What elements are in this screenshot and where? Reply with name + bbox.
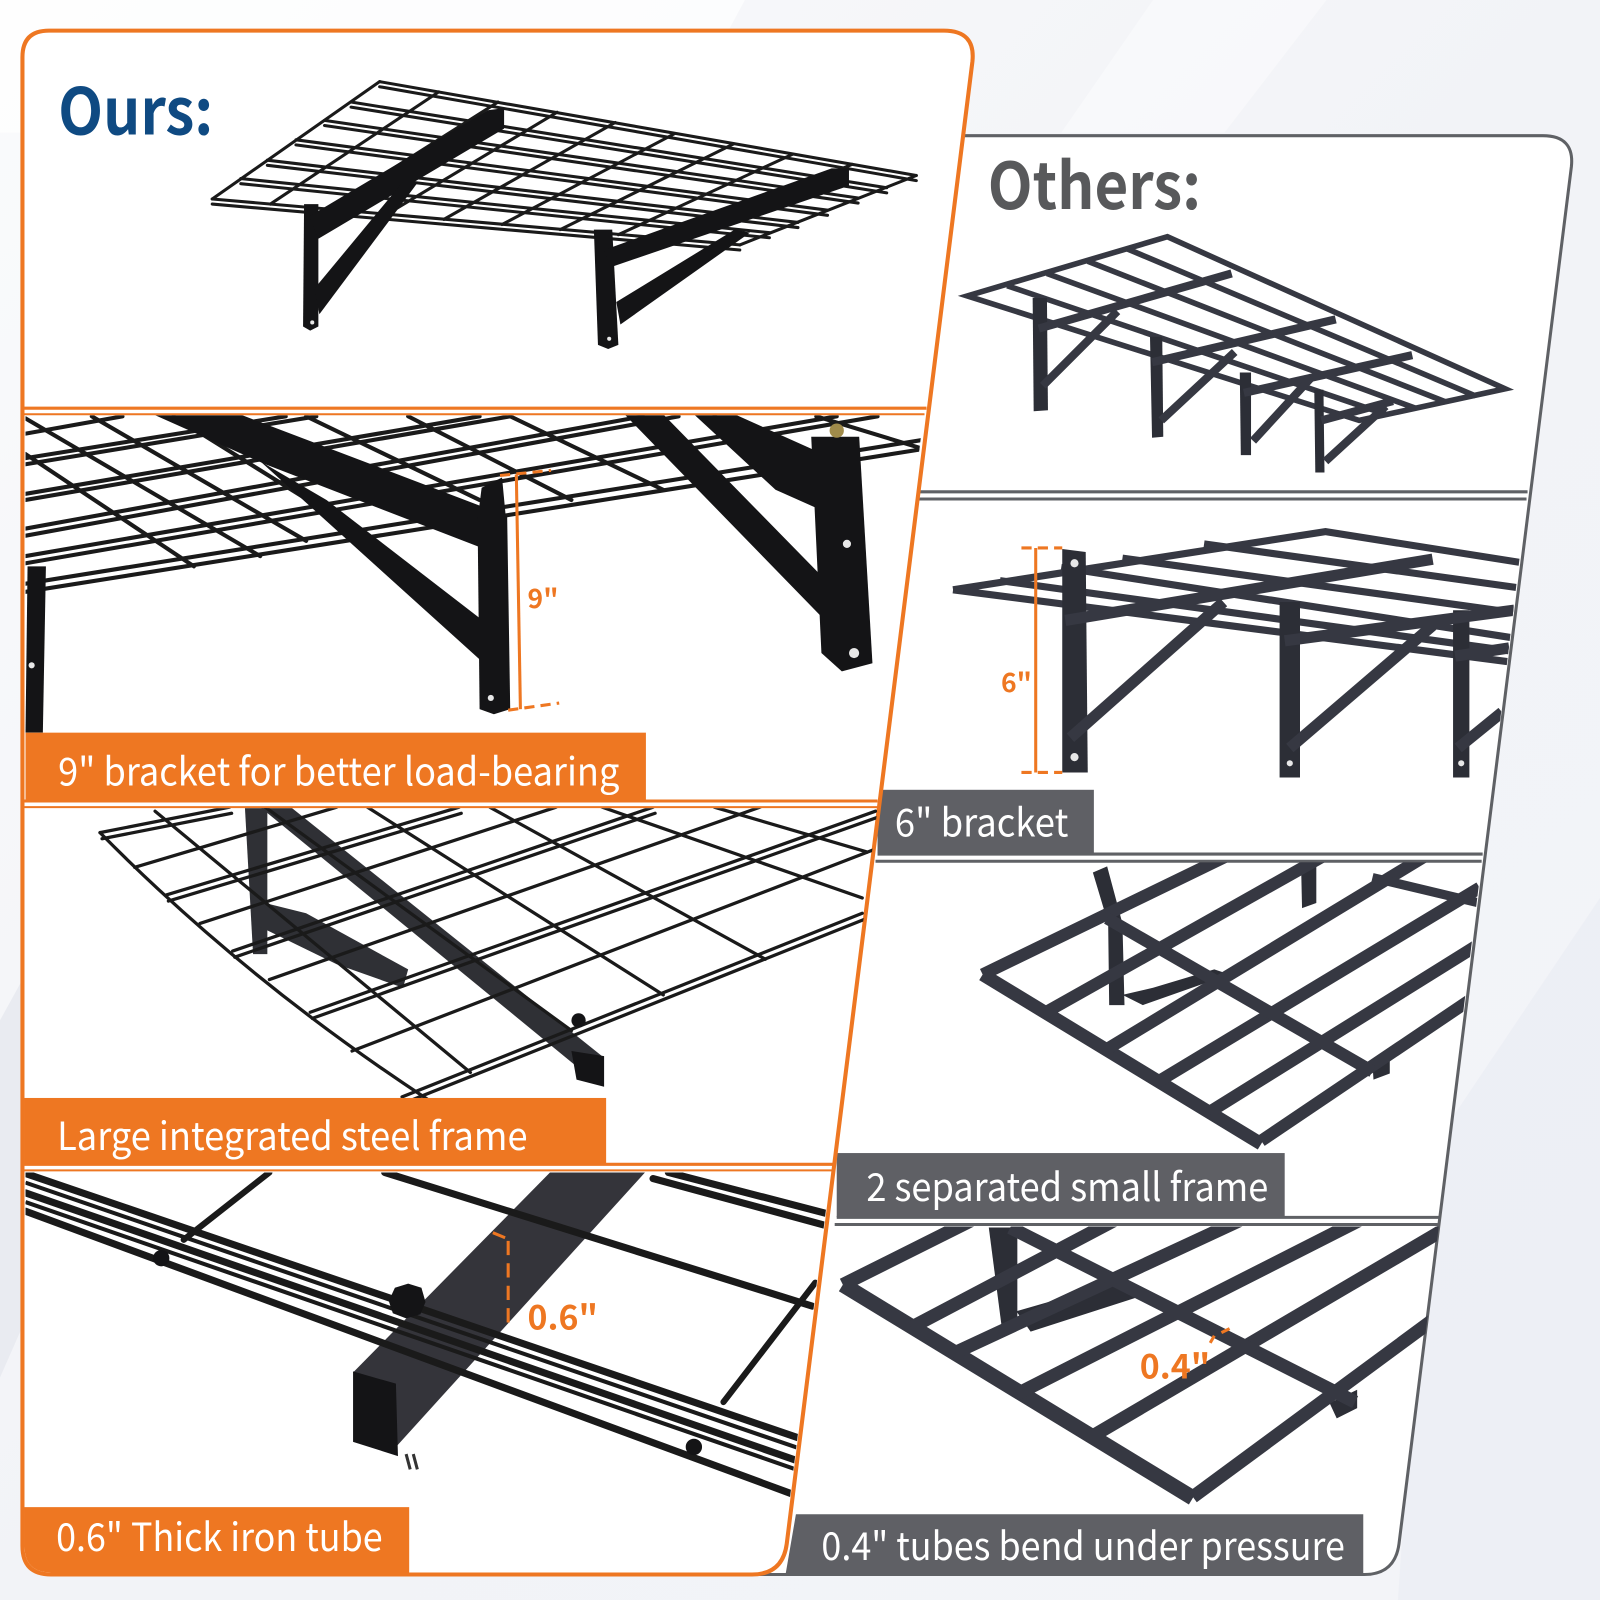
shelf photo: ours iron tube close-up (26, 1171, 830, 1494)
shelf photo: others separated frame (983, 857, 1480, 1144)
shelf photo: others thin tube (843, 1214, 1444, 1498)
shelf photo: ours integrated frame (100, 807, 878, 1103)
dimension: 9 inch (500, 470, 559, 710)
heading: Others: Others: (988, 134, 1201, 228)
dimension: 6 inch: 6" (1001, 661, 1032, 700)
dimension: 0.4 inch: 0.4" (1140, 1340, 1210, 1389)
caption: large integrated steel frame: Large integrated steel frame (57, 1106, 528, 1162)
caption: 9 inch bracket for better load-bearing: 9" bracket for better load-bearing (58, 742, 620, 798)
caption: 6 inch bracket: 6" bracket (895, 793, 1069, 849)
panel: others (755, 134, 1572, 1574)
divider lines: ours (24, 408, 927, 1170)
caption: 2 separated small frame: 2 separated small frame (866, 1157, 1268, 1213)
shelf photo: ours 9 inch bracket (26, 414, 923, 733)
shelf photo: others 6 inch bracket (953, 532, 1526, 778)
heading: Ours: Ours: (58, 60, 213, 154)
dimension: 0.4 inch (1140, 1329, 1230, 1389)
dimension: 6 inch (1001, 548, 1062, 772)
caption: 0.4 inch tubes bend under pressure: 0.4" tubes bend under pressure (821, 1516, 1345, 1572)
panel: ours (22, 31, 973, 1574)
divider lines: others (835, 492, 1528, 1224)
shelf photo: others four bracket (967, 237, 1505, 472)
shelf photo: ours full view (212, 82, 916, 349)
caption: 0.6 inch thick iron tube: 0.6" Thick iron tube (56, 1507, 383, 1563)
dimension: 0.6 inch: 0.6" (528, 1291, 598, 1340)
dimension: 0.6 inch (493, 1233, 598, 1340)
dimension: 9 inch: 9" (528, 577, 558, 616)
